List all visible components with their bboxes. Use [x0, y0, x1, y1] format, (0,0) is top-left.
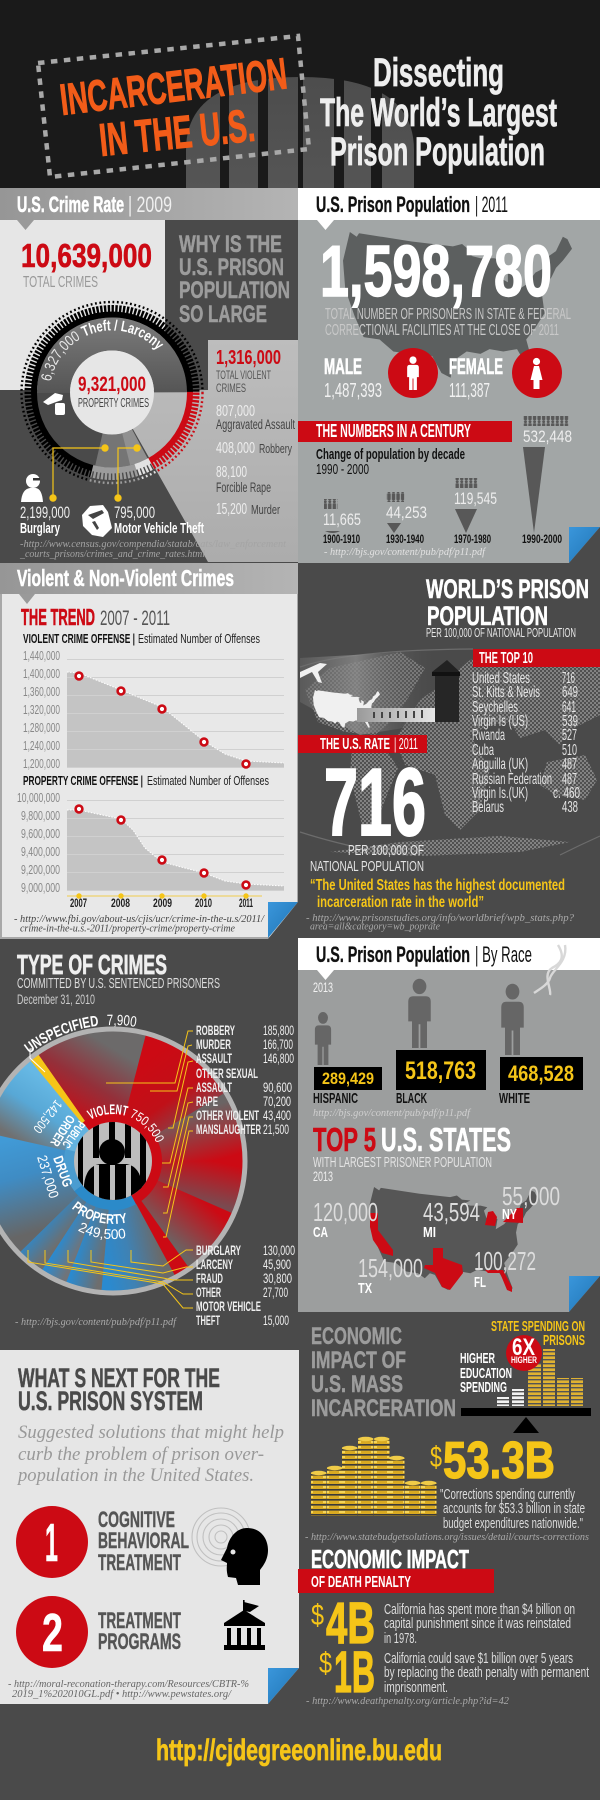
violent crime breakdown: Aggravated Assault	[216, 417, 295, 432]
source	[14, 914, 265, 934]
stat: burglary: 2,199,000	[20, 503, 70, 522]
header: population by race: U.S. Prison Population	[316, 942, 470, 967]
heading: why is the prison population so large	[179, 231, 290, 328]
stat: burglary	[20, 503, 70, 537]
stat: total crimes	[21, 237, 152, 291]
panel: prison population by race	[298, 938, 600, 1312]
chart: property crime offenses: 9,000,000	[21, 880, 60, 895]
heading: top 5 U.S. states: TOP 5	[313, 1121, 376, 1158]
pie labels: UNSPECIFIED	[24, 1016, 98, 1052]
figure: white: 468,528	[508, 1061, 574, 1086]
stat: $4B: $	[311, 1599, 324, 1632]
state labels: MI	[423, 1224, 436, 1241]
source: crime-in-the-u.s.-2011/property-crime/property-crime	[20, 924, 236, 934]
map: top 5 states	[369, 1187, 538, 1292]
chart: property crime offenses: 9,600,000	[21, 826, 60, 841]
chart: violent crime offenses: VIOLENT CRIME OFFENSE |	[23, 631, 135, 646]
chart: violent crime offenses: 1,360,000	[23, 684, 60, 699]
chart: property crime offenses: 2009	[153, 898, 172, 910]
legend: violent crime categories: 166,700	[263, 1036, 293, 1052]
chart: property crime offenses: 10,000,000	[17, 790, 60, 805]
stat: female: 111,387	[449, 380, 490, 402]
heading: the trend: THE TREND	[21, 604, 95, 630]
heading: world's prison population: POPULATION	[427, 601, 548, 631]
banner: the numbers in a century: THE NUMBERS IN A CENTURY	[316, 421, 471, 441]
legend: property crime categories: 130,000	[263, 1242, 295, 1258]
heading: why is the prison population so large: U.S. PRISON	[179, 254, 284, 281]
header: U.S. crime rate 2009: | 2009	[128, 192, 172, 217]
table: top 10 countries: 649	[562, 684, 578, 701]
folded corner	[569, 527, 600, 563]
panel: economic impact	[298, 1318, 591, 1707]
chart: property crimes ring	[20, 300, 204, 484]
heading: why is the prison population so large: POPULATION	[179, 277, 290, 304]
source: - http://bjs.gov/content/pub/pdf/p11.pdf	[15, 1317, 177, 1328]
table: top 10 countries: 487	[562, 756, 577, 773]
solution 1: cognitive behavioral treatment: BEHAVIORAL	[98, 1528, 189, 1553]
chart: violent crime offenses: 1,440,000	[23, 648, 60, 663]
solution 2: treatment programs	[16, 1596, 181, 1668]
chart: property crimes ring: Theft / Larceny	[80, 320, 164, 350]
chart: property crime offenses: 9,800,000	[21, 808, 60, 823]
chart: property crime offenses: 9,400,000	[21, 844, 60, 859]
chart: population change by decade: 1930-1940	[386, 534, 424, 546]
folded corner	[569, 1276, 600, 1312]
pie labels: 142,500	[30, 1097, 65, 1136]
source: - http://www.prisonstudies.org/info/worldbrief/wpb_stats.php?	[306, 913, 574, 924]
state labels: 43,594	[423, 1197, 480, 1227]
chart: population change by decade: 11,665	[323, 510, 361, 529]
icon: hand with bag	[43, 393, 65, 415]
state labels	[313, 1181, 560, 1297]
chart: violent crime offenses: 1,240,000	[23, 738, 60, 753]
violent crime breakdown: TOTAL VIOLENT	[216, 370, 271, 382]
intro text: Suggested solutions that might help	[18, 1422, 284, 1443]
source: - http://bjs.gov/content/pub/pdf/p11.pdf	[324, 547, 486, 558]
heading: economic impact of mass incarceration	[311, 1323, 456, 1422]
chart: violent crime offenses: 1,280,000	[23, 720, 60, 735]
table: top 10 countries: Virgin Is (US)	[472, 713, 528, 730]
footer link: http://cjdegreeonline.bu.edu	[156, 1734, 442, 1767]
state labels: FL	[474, 1274, 486, 1291]
source: - http://moral-reconation-therapy.com/Resources/CBTR-%	[8, 1679, 249, 1690]
heading: top 5 U.S. states: 2013	[313, 1169, 333, 1184]
chart: population change by decade: 44,253	[386, 503, 427, 522]
legend: violent crime categories: ROBBERY	[196, 1022, 235, 1038]
chart: property crime offenses: 2011	[239, 898, 253, 910]
legend: violent crime categories: OTHER SEXUAL	[196, 1065, 258, 1081]
source: - http://www.statebudgetsolutions.org/issues/detail/courts-corrections	[305, 1532, 589, 1543]
table: top 10 countries: 539	[562, 713, 578, 730]
header: population by race: | By Race	[475, 942, 532, 967]
chart: population change by decade: 532,448	[523, 427, 572, 446]
chart: property crimes ring: 6,327,000	[41, 331, 80, 380]
violent crime breakdown: 88,100	[216, 464, 247, 481]
table: top 10 countries: c. 460	[553, 785, 580, 802]
heading: economic impact of mass incarceration: IMPACT OF	[311, 1347, 406, 1374]
solution 1: cognitive behavioral treatment	[16, 1506, 189, 1578]
state labels: TX	[358, 1280, 372, 1297]
panel: prison population by race: 2013	[313, 979, 333, 995]
figure: white	[499, 984, 583, 1107]
solution 1: cognitive behavioral treatment: TREATMENT	[98, 1550, 181, 1575]
pie labels: 249,500	[78, 1222, 126, 1240]
figure: hispanic: 289,429	[322, 1069, 374, 1088]
banner: the U.S. rate: THE U.S. RATE	[320, 736, 390, 753]
legend: property crime categories: OTHER	[196, 1284, 221, 1300]
table: top 10 countries: 510	[562, 742, 577, 759]
stat: 716 per 100,000	[310, 749, 426, 875]
figure: black: 518,763	[405, 1057, 476, 1085]
stat: 716 per 100,000: 716	[324, 749, 426, 856]
chart: property crime offenses	[17, 773, 284, 910]
table: top 10 countries: 716	[562, 670, 575, 687]
solution 2: treatment programs: 2	[42, 1603, 63, 1663]
violent crime breakdown: Forcible Rape	[216, 480, 271, 495]
violent crime breakdown: 1,316,000	[216, 347, 281, 369]
heading: top 5 U.S. states: WITH LARGEST PRISONER POPULATION	[313, 1155, 492, 1171]
intro text: population in the United States.	[16, 1465, 254, 1486]
stat: $53.3B: $	[430, 1441, 442, 1474]
icon: prison bars	[186, 70, 414, 188]
pie labels: PROPERTY	[72, 1201, 126, 1224]
icon: prison wall and watchtower	[357, 660, 460, 722]
chart: property crime offenses: 2010	[195, 898, 212, 910]
legend: violent crime categories: ASSAULT	[196, 1050, 232, 1066]
heading: type of crimes	[17, 949, 220, 1007]
pie labels: PUBLIC	[59, 1118, 88, 1151]
header: U.S. crime rate 2009	[0, 188, 298, 230]
title	[320, 51, 557, 174]
figure: hispanic: HISPANIC	[313, 1090, 358, 1107]
stat: $1B: imprisonment.	[384, 1680, 448, 1696]
legend: violent crime categories: 90,600	[263, 1079, 292, 1095]
heading: top 5 U.S. states: U.S. STATES	[381, 1121, 511, 1158]
source	[8, 1679, 249, 1700]
legend: property crime categories: LARCENY	[196, 1256, 233, 1272]
quote: corrections spending	[440, 1486, 585, 1532]
subtitle: change of population: Change of population by decade	[316, 446, 465, 463]
table: top 10 countries: St. Kitts & Nevis	[472, 684, 540, 701]
table: top 10 countries	[472, 670, 580, 816]
panel: U.S. crime rate	[0, 188, 298, 562]
legend: violent crime categories	[196, 1022, 294, 1137]
heading: what's next: WHAT S NEXT FOR THE	[18, 1363, 220, 1393]
heading: what's next: U.S. PRISON SYSTEM	[18, 1386, 203, 1416]
stat: $1B: 1B	[334, 1640, 375, 1705]
subtitle: change of population	[316, 446, 465, 478]
chart: spending balance scale: HIGHER	[460, 1350, 495, 1367]
table: top 10 countries: Seychelles	[472, 699, 518, 716]
icon: head with signal rings	[192, 1508, 268, 1585]
heading: economic impact of death penalty	[298, 1544, 494, 1593]
pie labels	[24, 1014, 164, 1240]
chart: spending balance scale: SPENDING	[460, 1379, 507, 1396]
panel: type of crimes	[0, 949, 295, 1328]
table: top 10 countries: 641	[562, 699, 576, 716]
legend: property crime categories: 30,800	[263, 1270, 292, 1286]
violent crime breakdown: Murder	[251, 502, 280, 517]
state labels: NY	[502, 1206, 517, 1223]
header: U.S. prison population 2011	[298, 188, 600, 230]
heading: economic impact of mass incarceration: U.S. MASS	[311, 1371, 403, 1398]
chart: crime type pie	[0, 1014, 248, 1296]
folded corner	[268, 902, 298, 939]
header: violent and non-violent crimes	[0, 563, 298, 604]
header: population by race	[298, 938, 600, 980]
violent crime breakdown: Robbery	[259, 441, 292, 456]
stat: female	[449, 348, 562, 402]
source: - http://www.deathpenalty.org/article.php?id=42	[306, 1696, 509, 1707]
solution 1: cognitive behavioral treatment: COGNITIVE	[98, 1507, 175, 1532]
table: top 10 countries: United States	[472, 670, 530, 687]
stat: burglary: Burglary	[20, 521, 60, 537]
stat: $4B: in 1978.	[384, 1631, 417, 1647]
solution 1: cognitive behavioral treatment: 1	[45, 1513, 58, 1573]
heading: economic impact of death penalty: ECONOMIC IMPACT	[311, 1544, 469, 1574]
banner: the U.S. rate: | 2011	[394, 736, 418, 753]
pie labels: DRUG	[50, 1154, 76, 1189]
stat: motor vehicle theft	[114, 503, 204, 537]
pie labels: ORDER	[47, 1112, 78, 1150]
table: top 10 countries: Rwanda	[472, 727, 505, 744]
chart: property crime offenses: 2008	[111, 898, 130, 910]
state labels: CA	[313, 1224, 328, 1241]
legend: property crime categories: FRAUD	[196, 1270, 223, 1286]
chart: property crime offenses: PROPERTY CRIME OFFENSE |	[23, 773, 143, 788]
chart: property crime offenses: Estimated Number of Offenses	[147, 774, 269, 788]
table: top 10 countries: 438	[562, 799, 578, 816]
subtitle: change of population: 1990 - 2000	[316, 461, 369, 478]
stat: $1B: $	[319, 1647, 332, 1680]
heading: why is the prison population so large: SO LARGE	[179, 301, 267, 328]
icon: DNA helix	[534, 945, 565, 995]
stamp: incarceration in the U.S.	[38, 36, 309, 177]
callout lines: burglary and motor vehicle theft	[49, 444, 141, 502]
pie labels: 750,500	[131, 1108, 164, 1142]
banner: the numbers in a century	[298, 421, 512, 442]
heading: what's next	[18, 1363, 220, 1416]
icon: government building	[224, 1600, 265, 1650]
figure: hispanic	[313, 1012, 382, 1107]
stat: female: FEMALE	[449, 354, 503, 379]
header: U.S. crime rate 2009: U.S. Crime Rate	[17, 192, 124, 217]
figure: black: BLACK	[396, 1090, 427, 1107]
legend: property crime categories: THEFT	[196, 1312, 220, 1328]
chart: violent crime offenses: 1,200,000	[23, 756, 60, 771]
table: top 10 countries: 487	[562, 771, 577, 788]
source: _courts_prisons/crimes_and_crime_rates.html	[19, 549, 205, 560]
callout lines: pie categories	[28, 1031, 193, 1308]
solution 2: treatment programs: PROGRAMS	[98, 1629, 181, 1654]
stat: $53.3B: 53.3B	[443, 1432, 555, 1490]
chart: population change by decade: 1970-1980	[454, 534, 491, 546]
source: -http://www.census.gov/compendia/statab/cats/law_enforcement	[20, 539, 286, 550]
state labels: 120,000	[313, 1197, 378, 1227]
state labels: 154,000	[358, 1253, 423, 1283]
state labels: 100,272	[474, 1246, 536, 1276]
stat: total crimes: TOTAL CRIMES	[23, 274, 98, 291]
stat: total crimes: 10,639,000	[21, 237, 152, 274]
chart: violent crime offenses: Estimated Number of Offenses	[138, 632, 260, 646]
source: 2019_1%202010GL.pdf • http://www.pewstates.org/	[12, 1689, 232, 1700]
chart: property crime offenses: 2007	[70, 898, 87, 910]
header banner	[0, 0, 600, 188]
state labels: 55,000	[502, 1181, 560, 1211]
stat: motor vehicle theft: Motor Vehicle Theft	[114, 521, 204, 537]
heading: the trend: 2007 - 2011	[100, 607, 170, 630]
chart: population change by decade: 1900-1910	[323, 534, 360, 546]
stat: male: 1,487,393	[324, 380, 382, 402]
violent crime breakdown: CRIMES	[216, 383, 246, 395]
heading: economic impact of mass incarceration: ECONOMIC	[311, 1323, 402, 1350]
stat: $4B	[311, 1591, 575, 1656]
chart: violent crime offenses	[23, 631, 284, 771]
banner: the top 10	[473, 649, 600, 667]
panel: what's next for the U.S. prison system	[0, 1350, 299, 1704]
panel: violent and non-violent crimes	[0, 563, 298, 939]
heading: why is the prison population so large: WHY IS THE	[179, 231, 282, 258]
legend: violent crime categories: OTHER VIOLENT	[196, 1107, 259, 1123]
violent crime breakdown: 15,200	[216, 501, 247, 518]
table: top 10 countries: Anguilla (UK)	[472, 756, 528, 773]
banner: the top 10: THE TOP 10	[479, 650, 533, 667]
spotlight beam	[300, 650, 440, 735]
header: violent and non-violent crimes: Violent & Non-Violent Crimes	[17, 565, 234, 591]
stat: total prisoners	[320, 232, 571, 339]
solution 2: treatment programs: TREATMENT	[98, 1608, 181, 1633]
violent crime breakdown	[216, 347, 295, 518]
heading: economic impact of mass incarceration: INCARCERATION	[311, 1395, 456, 1422]
legend: violent crime categories: ASSAULT	[196, 1079, 232, 1095]
panel: U.S. prison population 2011	[298, 188, 600, 563]
legend: violent crime categories: 43,400	[263, 1107, 291, 1123]
legend: property crime categories: MOTOR VEHICLE	[196, 1298, 261, 1314]
chart: population change by decade: 119,545	[454, 489, 497, 508]
legend: violent crime categories: RAPE	[196, 1093, 218, 1109]
heading: type of crimes: TYPE OF CRIMES	[17, 949, 167, 980]
stat: 716 per 100,000: NATIONAL POPULATION	[310, 858, 424, 875]
legend: property crime categories: 27,700	[263, 1284, 288, 1300]
quote: incarceration rate in the world”	[317, 894, 484, 911]
chart: violent crime offenses: 1,320,000	[23, 702, 60, 717]
source	[19, 539, 286, 560]
violent crime breakdown: 408,000	[216, 440, 255, 457]
table: top 10 countries: 527	[562, 727, 577, 744]
title: Dissecting	[373, 51, 504, 95]
stamp: incarceration in the U.S.: IN THE U.S.	[97, 99, 257, 166]
pie labels: 7,900	[107, 1014, 136, 1027]
pie labels: VIOLENT	[86, 1104, 129, 1119]
violent crime breakdown: 807,000	[216, 403, 255, 420]
chart: violent crime offenses: 1,400,000	[23, 666, 60, 681]
source: http://bjs.gov/content/pub/pdf/p11.pdf	[313, 1108, 471, 1119]
legend: property crime categories: BURGLARY	[196, 1242, 241, 1258]
icon: burglar	[21, 474, 43, 502]
chart: population change by decade	[323, 416, 572, 546]
legend: property crime categories: 45,900	[263, 1256, 291, 1272]
chart: spending balance scale	[460, 1318, 591, 1433]
chart: population change by decade: 1990-2000	[522, 534, 562, 546]
panel: world's prison population	[298, 574, 600, 932]
intro text	[16, 1422, 284, 1486]
source: - http://www.fbi.gov/about-us/cjis/ucr/crime-in-the-u.s/2011/	[14, 914, 265, 925]
stat: male	[324, 348, 438, 402]
legend: violent crime categories: MANSLAUGHTER	[196, 1121, 261, 1137]
legend: violent crime categories: 21,500	[263, 1121, 289, 1137]
folded corner	[268, 1668, 299, 1704]
heading: top 5 U.S. states	[313, 1121, 511, 1184]
stat: 716 per 100,000: PER 100,000 OF	[348, 842, 424, 859]
header: U.S. prison population 2011: | 2011	[475, 192, 508, 217]
legend: violent crime categories: 185,800	[263, 1022, 294, 1038]
pie labels: 237,000	[34, 1153, 62, 1200]
chart: spending balance scale: 6X	[512, 1334, 535, 1361]
stat: male: MALE	[324, 354, 362, 379]
heading: type of crimes: December 31, 2010	[17, 991, 95, 1007]
stat: $1B	[319, 1640, 589, 1705]
icon: prisoner behind bars	[74, 1122, 152, 1200]
quote	[310, 877, 565, 911]
figure: white: WHITE	[499, 1090, 530, 1107]
icon: coin stacks	[311, 1437, 437, 1516]
header: U.S. prison population 2011: U.S. Prison Population	[316, 192, 470, 217]
stamp: incarceration in the U.S.: INCARCERATION	[57, 49, 290, 125]
source: area=all&category=wb_poprate	[310, 922, 441, 932]
legend: property crime categories: 15,000	[263, 1312, 289, 1328]
chart: property crime offenses: 9,200,000	[21, 862, 60, 877]
chart: spending balance scale: HIGHER	[511, 1355, 537, 1365]
map: world	[300, 649, 600, 856]
table: top 10 countries: Virgin Is.(UK)	[472, 785, 528, 802]
stat: $4B: 4B	[326, 1591, 375, 1656]
heading: economic impact of death penalty: OF DEATH PENALTY	[311, 1574, 411, 1591]
intro text: curb the problem of prison over-	[18, 1444, 264, 1465]
icon: car thief	[82, 505, 112, 537]
heading: type of crimes: COMMITTED BY U.S. SENTENCED PRISONERS	[17, 975, 220, 992]
map: United States	[343, 232, 572, 378]
chart: spending balance scale: EDUCATION	[460, 1365, 512, 1382]
legend: violent crime categories: 70,200	[263, 1093, 291, 1109]
legend: property crime categories	[196, 1242, 295, 1328]
table: top 10 countries: Belarus	[472, 799, 504, 816]
heading: world's prison population	[426, 574, 589, 640]
legend: violent crime categories: MURDER	[196, 1036, 231, 1052]
source	[306, 913, 574, 932]
legend: violent crime categories: 146,800	[263, 1050, 294, 1066]
icon: U.S. silhouette	[300, 663, 380, 728]
stat: motor vehicle theft: 795,000	[114, 503, 155, 522]
chart: property crimes ring: PROPERTY CRIMES	[78, 396, 149, 410]
figure: black	[396, 979, 486, 1107]
chart: property crimes ring: 9,321,000	[78, 373, 146, 396]
table: top 10 countries: Cuba	[472, 742, 494, 759]
